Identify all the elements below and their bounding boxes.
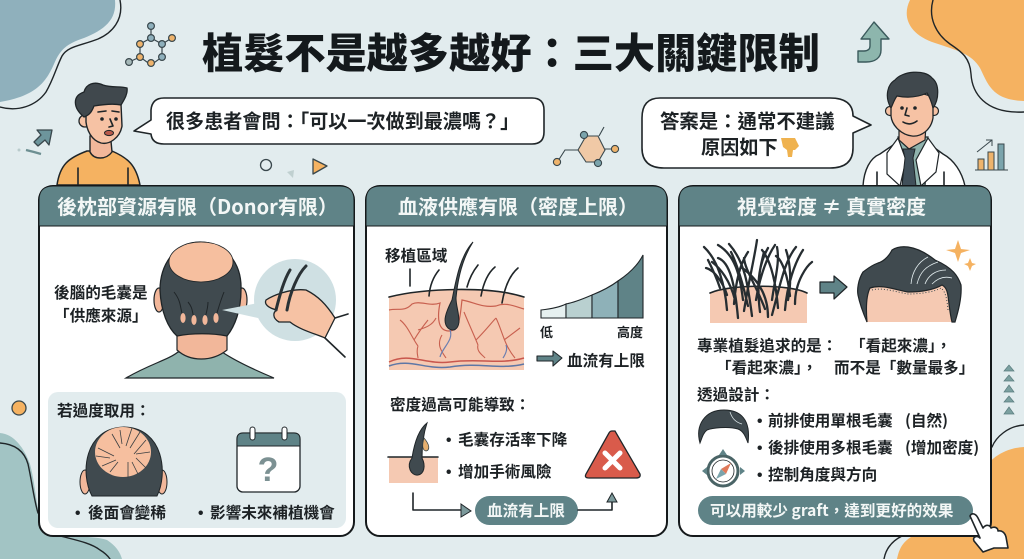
chart labels: 高度 <box>617 322 643 341</box>
text: consequence bullets: 毛囊存活率下降 <box>458 428 568 450</box>
text: professional goal: 「看起來濃」， <box>850 334 951 356</box>
callout: patient question <box>134 98 544 144</box>
illustration: scalp cross-section <box>389 242 524 370</box>
icon: molecule top left <box>126 23 175 66</box>
text: design bullets <box>757 409 979 485</box>
icon: follicle <box>388 423 438 483</box>
text: design bullets: (增加密度) <box>905 436 979 458</box>
icon: molecule middle <box>553 127 619 167</box>
decorative shapes middle <box>260 159 327 178</box>
text: bullets <box>75 501 335 523</box>
icon: pointing hand <box>781 138 799 157</box>
text: design bullets: 後排使用多根毛囊 <box>768 436 893 458</box>
text: donor source: 後腦的毛囊是 <box>54 281 148 303</box>
panel: blood supply <box>366 186 667 536</box>
icon: small arrow left <box>18 130 52 154</box>
text: bullets: • <box>75 505 80 522</box>
chart labels: 低 <box>540 322 553 341</box>
arrow: before to after <box>820 276 847 299</box>
callout: doctor answer: 答案是：通常不建議 <box>660 105 835 134</box>
label: graft area <box>385 244 448 286</box>
text: consequence bullets: • <box>446 464 451 481</box>
icon: pointer hand <box>970 514 1008 552</box>
title: 植髮不是越多越好：三大關鍵限制 <box>202 20 820 80</box>
label: graft area: 移植區域 <box>385 244 448 266</box>
icon: bar chart <box>975 140 1008 170</box>
text: bullets: • <box>198 505 203 522</box>
panel header: blood: 血液供應有限（密度上限） <box>398 191 638 220</box>
text: consequences: 密度過高可能導致： <box>390 393 530 415</box>
icon: compass <box>702 449 745 486</box>
illustration: thinning head <box>80 427 167 496</box>
flow: blood flow cap: 血流有上限 <box>487 499 565 521</box>
pill: conclusion <box>698 496 973 525</box>
panel header: visual <box>679 186 991 226</box>
panel: donor limit <box>39 186 354 536</box>
panel: visual density <box>679 186 991 536</box>
text: design bullets: • <box>757 440 762 457</box>
text: consequence bullets: 增加手術風險 <box>458 460 552 482</box>
icon: sparkles <box>946 240 976 271</box>
icon: orange dot <box>12 401 26 415</box>
illustration: styled hair <box>858 247 961 322</box>
callout: doctor answer: 原因如下 <box>701 132 778 160</box>
panel header: visual: 視覺密度 ≠ 真實密度 <box>737 191 926 220</box>
character: patient <box>57 83 140 185</box>
icon: calendar question: ? <box>258 451 278 489</box>
blob: bottom left <box>0 433 122 559</box>
text: by design: 透過設計： <box>697 383 775 405</box>
icon: calendar question <box>237 427 300 492</box>
subpanel: over harvesting <box>48 392 346 528</box>
text: design bullets: (自然) <box>905 409 948 431</box>
text: design bullets: 控制角度與方向 <box>768 463 877 485</box>
text: design bullets: 前排使用單根毛囊 <box>768 409 893 431</box>
text: bullets: 後面會變稀 <box>88 501 166 523</box>
flow: blood flow cap <box>413 493 617 525</box>
blob: top left <box>0 0 121 109</box>
icon: stacked triangles <box>1004 365 1014 414</box>
icon: up arrow top right <box>858 22 889 62</box>
callout circle: hair extraction <box>222 259 348 357</box>
panel header: donor <box>39 186 354 226</box>
text: donor source: 「供應來源」 <box>54 304 148 326</box>
text: donor source <box>54 281 148 326</box>
subpanel: over harvesting: 若過度取用： <box>57 399 151 421</box>
text: consequence bullets: • <box>446 432 451 449</box>
text: professional goal: 專業植髮追求的是： <box>697 334 837 356</box>
text: design bullets: • <box>757 413 762 430</box>
text: professional goal: 而不是「數量最多」 <box>834 356 974 378</box>
callout: patient question: 很多患者會問：「可以一次做到最濃嗎？」 <box>166 106 519 134</box>
chart: density vs blood flow <box>541 255 643 318</box>
illustration: back of head <box>126 242 274 378</box>
text: bullets: 影響未來補植機會 <box>210 501 335 523</box>
blob: bottom right <box>884 425 1024 559</box>
panel header: donor: 後枕部資源有限（Donor有限） <box>57 191 338 220</box>
illustration: dense follicles <box>704 240 812 323</box>
text: professional goal <box>697 334 974 378</box>
blob: top right <box>907 0 1024 112</box>
icon: hair <box>699 410 749 443</box>
text: professional goal: 「看起來濃」， <box>716 356 817 378</box>
arrow label: blood flow cap: 血流有上限 <box>567 349 645 371</box>
chart labels <box>540 322 643 341</box>
text: design bullets: • <box>757 467 762 484</box>
character: doctor <box>863 72 965 186</box>
pill: conclusion: 可以用較少 graft，達到更好的效果 <box>710 499 954 521</box>
icon: warning triangle <box>585 431 640 478</box>
panel header: blood <box>366 186 667 226</box>
callout: doctor answer <box>642 98 871 168</box>
text: consequence bullets <box>446 428 568 482</box>
